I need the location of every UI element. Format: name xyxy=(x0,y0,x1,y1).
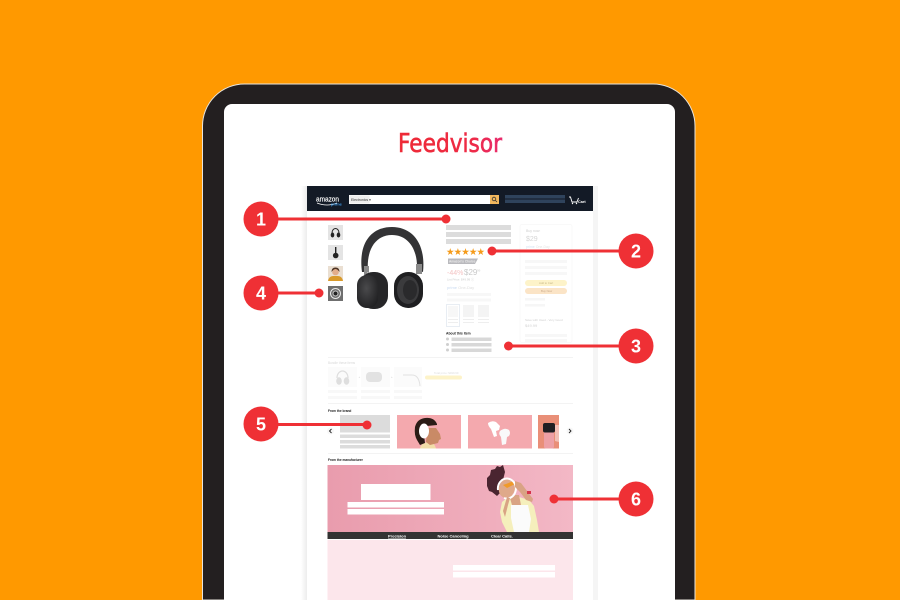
callout 3: about this item xyxy=(504,328,654,364)
divider xyxy=(328,402,573,405)
callout 4: images xyxy=(244,276,324,310)
bundle section: + xyxy=(391,375,393,379)
bundle section: + xyxy=(358,375,360,379)
bundle section xyxy=(328,361,462,399)
heading: From the brand xyxy=(328,409,351,413)
callout 2: ratings xyxy=(488,234,654,268)
variant options xyxy=(446,304,489,326)
light pink feature panel xyxy=(328,540,573,600)
buy box: Add to Cart xyxy=(539,281,553,285)
brand photo: earbuds xyxy=(468,415,532,448)
buy box: prime One-Day xyxy=(526,245,550,249)
brand photo: smartwatch xyxy=(538,415,559,448)
bundle section: Bundle these items xyxy=(328,361,356,365)
thumbnails xyxy=(328,225,343,301)
icon: cart xyxy=(569,197,586,204)
product page mockup xyxy=(301,186,598,600)
feature tab bar: Clear Calls. xyxy=(491,534,513,538)
bundle section: Total price: $499.99 xyxy=(434,371,459,375)
callout 5: brand story xyxy=(244,406,372,442)
logo: Feedvisor: Feedvisor xyxy=(398,129,502,159)
callout 1: title: 1 xyxy=(256,210,266,230)
callout 1: title xyxy=(244,202,450,236)
about this item: About this item xyxy=(446,332,471,336)
banner xyxy=(328,465,573,532)
brand photo: man with headphones xyxy=(397,415,461,448)
from the manufacturer section xyxy=(328,458,573,600)
amazon choice badge: Amazon's Choice xyxy=(449,260,476,264)
buy box: Buy Now xyxy=(541,289,553,293)
heading: From the manufacturer xyxy=(328,458,364,462)
carousel arrows xyxy=(327,428,574,434)
buy box: $29 xyxy=(526,236,538,243)
buy box xyxy=(520,224,572,342)
price block: prime One-Day xyxy=(447,285,474,290)
callout 6: A+ content xyxy=(550,482,654,516)
callout 2: ratings: 2 xyxy=(631,242,641,262)
buy box: $49.99 xyxy=(525,323,538,328)
amazon prime logo: prime xyxy=(331,202,343,206)
banner text placeholders xyxy=(348,484,444,514)
callout 5: brand story: 5 xyxy=(256,414,266,434)
amazon prime logo: amazon xyxy=(316,194,339,204)
buy box: Buy now: xyxy=(526,229,540,233)
price block: $29 xyxy=(464,268,478,277)
price block: List Price: $49.99 ⓘ xyxy=(447,276,474,282)
woman with headphones xyxy=(487,465,539,532)
buy box: Save with Used - Very Good xyxy=(525,318,563,322)
product title placeholders xyxy=(446,225,511,244)
icon: cart: Cart xyxy=(578,200,586,204)
price block: -44% xyxy=(447,270,463,277)
callout 3: about this item: 3 xyxy=(631,336,641,356)
search box xyxy=(349,195,499,204)
brand placeholder card xyxy=(340,415,390,448)
callout 6: A+ content: 6 xyxy=(631,490,641,510)
divider xyxy=(328,356,573,359)
feature tab bar: Noise Canceling xyxy=(438,534,469,538)
amazon choice badge xyxy=(448,258,478,264)
price block: 99 xyxy=(477,268,481,272)
search box: Electronics ▾ xyxy=(351,198,371,202)
feature tab bar xyxy=(328,532,573,539)
header bar xyxy=(307,186,593,211)
headphones product image xyxy=(357,227,423,309)
feature tab bar: Precision xyxy=(388,534,407,538)
nav placeholders xyxy=(505,195,565,203)
about this item xyxy=(446,332,492,352)
tablet frame xyxy=(202,84,695,600)
from the brand section xyxy=(327,409,574,448)
callout 4: images: 4 xyxy=(256,284,266,304)
star rating: ★★★★★ xyxy=(446,247,485,258)
divider xyxy=(328,452,573,455)
price block xyxy=(447,268,491,302)
